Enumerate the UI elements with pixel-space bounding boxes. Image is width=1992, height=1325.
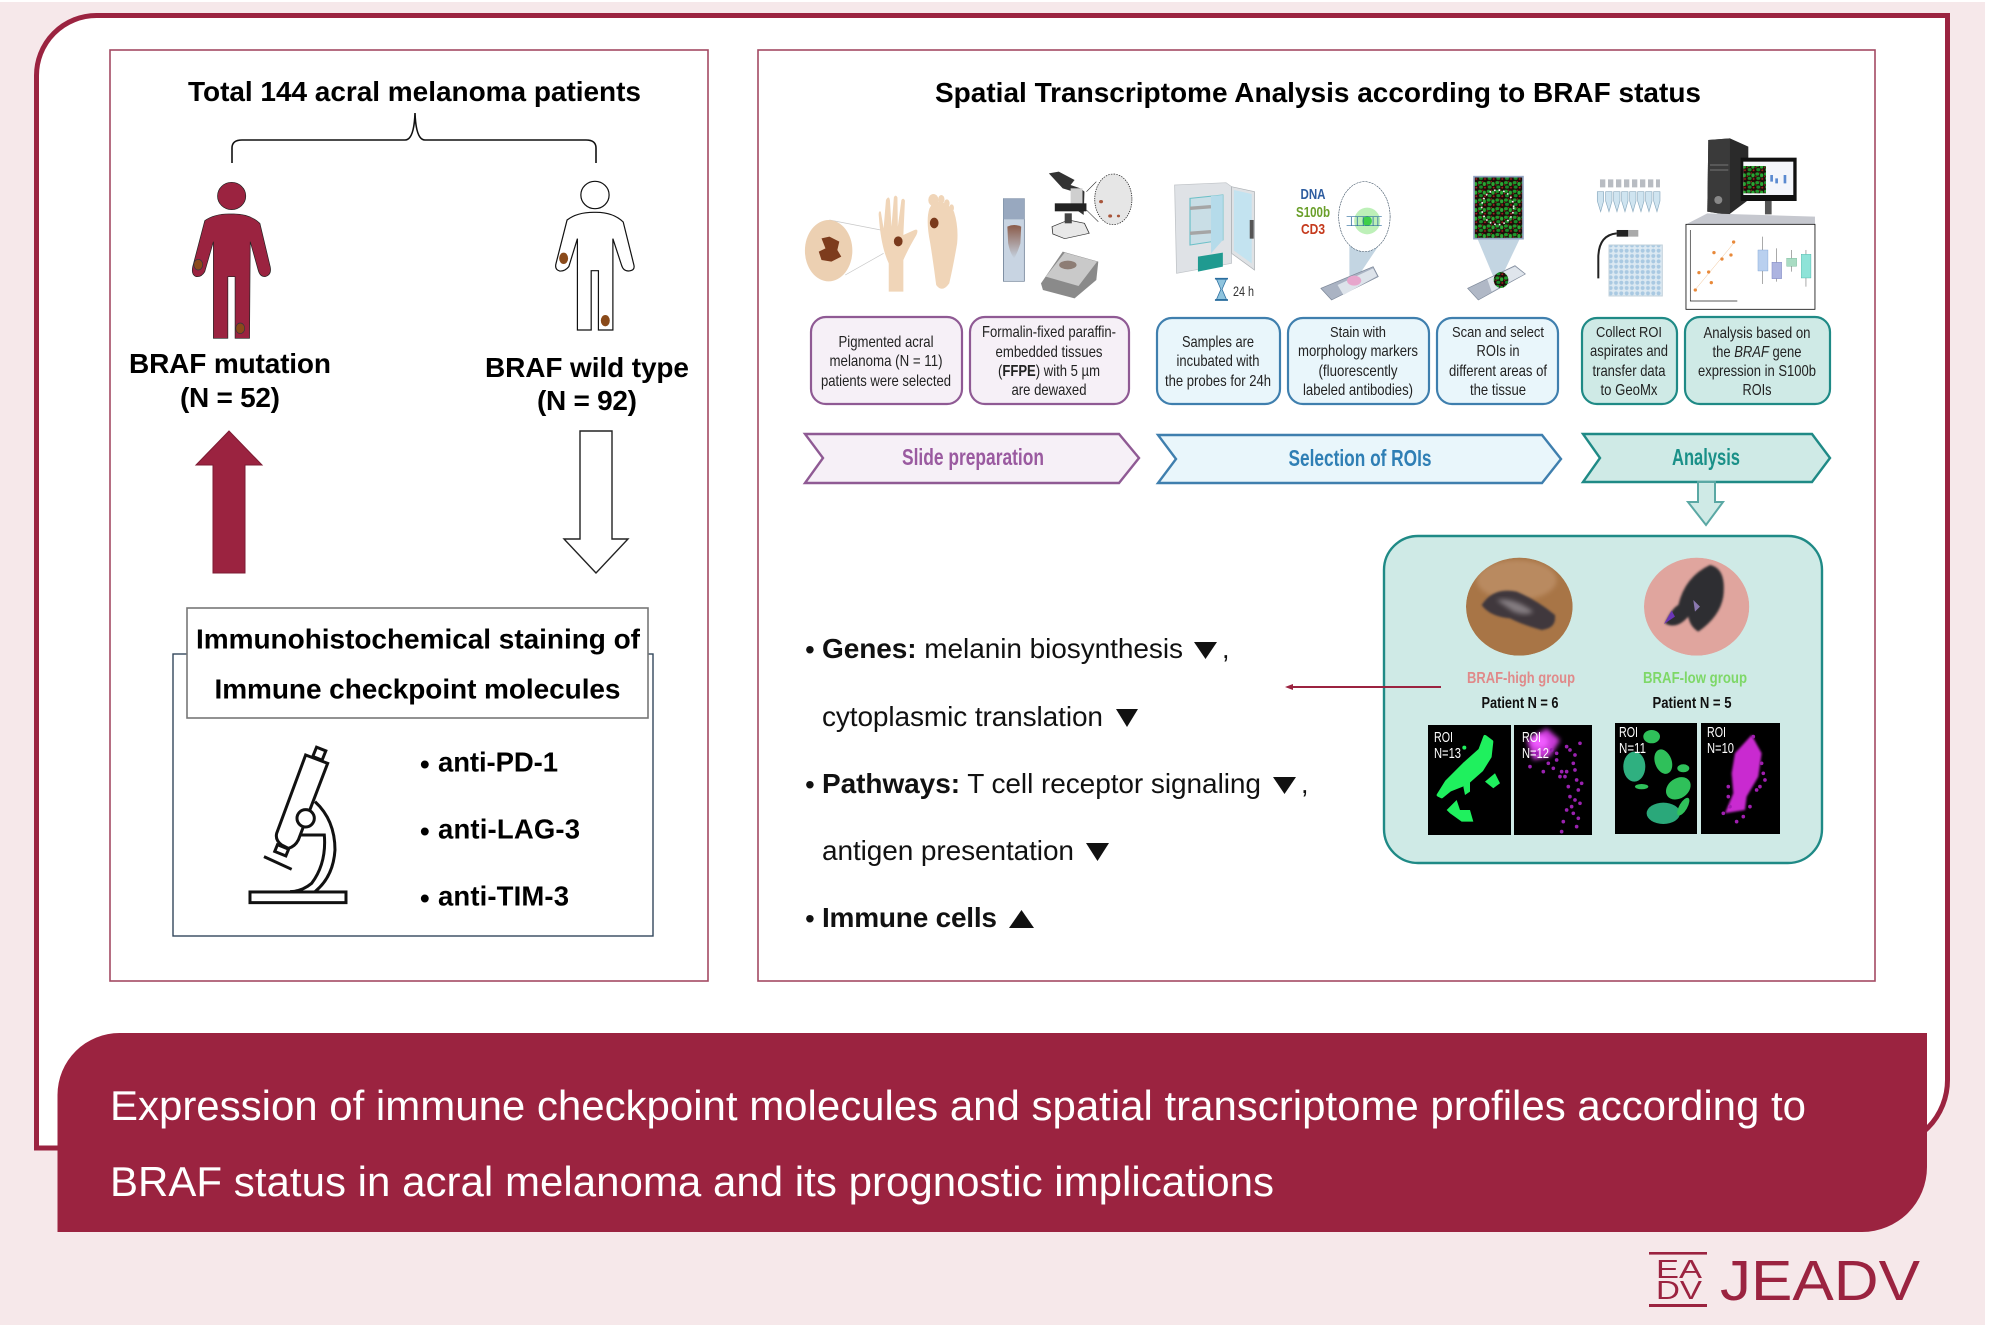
arrow marker: melanin down xyxy=(1194,642,1217,659)
step card: morphology markers: (fluorescently xyxy=(1318,363,1398,380)
label: BRAF-high group: BRAF-high group xyxy=(1467,670,1575,687)
antibody list xyxy=(420,746,580,914)
label: BRAF-low group: BRAF-low group xyxy=(1643,670,1747,687)
heading: total patients: Total 144 acral melanoma patients xyxy=(188,76,641,107)
step card: scan ROIs xyxy=(1437,318,1558,404)
results list: • xyxy=(805,903,815,934)
step card: incubation: the probes for 24h xyxy=(1165,373,1271,390)
image: ROI high green xyxy=(1428,725,1511,835)
arrow marker: presentation down xyxy=(1086,843,1109,861)
step card: scan ROIs: ROIs in xyxy=(1476,343,1520,360)
arrow: up xyxy=(196,431,262,573)
antibody list: • xyxy=(420,882,430,914)
staining title: Immunohistochemical staining of xyxy=(196,624,641,654)
labels: DNA S100b CD3: CD3 xyxy=(1301,221,1325,238)
logo: JEADV: EA xyxy=(1656,1254,1703,1284)
panel: BRAF groups xyxy=(1384,536,1822,863)
step card: incubation: incubated with xyxy=(1176,353,1260,370)
chevron: slide preparation: Slide preparation xyxy=(902,444,1044,470)
arrow marker: translation down xyxy=(1116,709,1138,727)
step card: incubation xyxy=(1157,318,1280,404)
image: ROI low purple: N=10 xyxy=(1707,741,1734,757)
image: ROI high green: ROI xyxy=(1434,730,1453,746)
staining title: Immune checkpoint molecules xyxy=(214,674,620,704)
logo: JEADV: JEADV xyxy=(1720,1249,1920,1313)
icon: tubes and plate xyxy=(1597,183,1662,296)
label: BRAF-low group xyxy=(1643,670,1747,712)
label: BRAF mutation: BRAF mutation xyxy=(129,348,331,379)
step card: morphology markers: Stain with xyxy=(1330,324,1386,341)
results list: Immune cells xyxy=(822,902,997,933)
arrow marker: signaling down xyxy=(1273,777,1296,794)
panel: spatial transcriptome analysis xyxy=(758,50,1875,981)
antibody list: • xyxy=(420,748,430,780)
photo: BRAF-high lesion xyxy=(1466,558,1573,656)
step card: morphology markers: morphology markers xyxy=(1298,343,1418,360)
arrow: analysis down xyxy=(1688,482,1723,525)
chevron: selection of ROIs: Selection of ROIs xyxy=(1288,445,1432,471)
step card: BRAF analysis xyxy=(1685,317,1830,404)
step card: morphology markers: labeled antibodies) xyxy=(1303,382,1413,399)
label: BRAF wild type: BRAF wild type xyxy=(485,352,689,383)
image: ROI high purple xyxy=(1514,725,1592,835)
chevron: analysis: Analysis xyxy=(1672,444,1740,470)
logo: JEADV: DV xyxy=(1656,1275,1703,1305)
step card: scan ROIs: different areas of xyxy=(1449,363,1547,380)
staining box xyxy=(173,608,653,936)
step card: BRAF analysis: the BRAF gene xyxy=(1712,344,1802,361)
step card: scan ROIs: Scan and select xyxy=(1452,324,1545,341)
title banner: BRAF status in acral melanoma and its prognostic implications xyxy=(110,1158,1274,1205)
results list: , xyxy=(1301,769,1309,799)
image: ROI low green: N=11 xyxy=(1619,741,1646,757)
icon: red person xyxy=(192,182,271,338)
image: ROI low purple xyxy=(1701,723,1780,834)
step card: scan ROIs: the tissue xyxy=(1470,382,1526,399)
label: BRAF mutation: (N = 52) xyxy=(180,382,280,413)
label: BRAF-high group: Patient N = 6 xyxy=(1482,695,1559,712)
bracket xyxy=(232,113,596,163)
results list xyxy=(805,633,1309,934)
staining title xyxy=(187,608,648,718)
results list: Pathways: T cell receptor signaling xyxy=(822,768,1261,799)
step card: FFPE: Formalin-fixed paraffin- xyxy=(982,324,1116,341)
chevron: slide preparation xyxy=(805,434,1139,483)
image: ROI low green xyxy=(1615,723,1697,834)
icon: magnified stain xyxy=(1321,182,1390,300)
icon: slide, microscope, hot plate xyxy=(1003,172,1132,298)
heading: spatial transcriptome: Spatial Transcriptome Analysis according to BRAF status xyxy=(935,77,1701,108)
label: BRAF-low group: Patient N = 5 xyxy=(1652,695,1732,712)
results list: cytoplasmic translation xyxy=(822,701,1103,732)
antibody list: • xyxy=(420,816,430,846)
results list: , xyxy=(1222,634,1230,664)
labels: DNA S100b CD3 xyxy=(1296,186,1330,238)
step card: collect aspirates: transfer data xyxy=(1592,363,1666,380)
title banner xyxy=(58,1033,1927,1232)
image: ROI high green: N=13 xyxy=(1434,746,1461,762)
step card: pigmented acral melanoma: patients were selected xyxy=(821,373,951,390)
step card: pigmented acral melanoma: melanoma (N = 11) xyxy=(830,353,942,370)
label: 24 h: 24 h xyxy=(1233,283,1254,299)
step card: FFPE xyxy=(970,317,1129,404)
results list: • xyxy=(805,769,815,800)
icon: hourglass xyxy=(1215,279,1228,300)
icon: white person xyxy=(556,181,634,330)
antibody list: anti-TIM-3 xyxy=(438,880,569,912)
step card: BRAF analysis: Analysis based on xyxy=(1704,325,1810,342)
labels: DNA S100b CD3: DNA xyxy=(1300,186,1326,203)
image: ROI high purple: N=12 xyxy=(1522,746,1549,762)
label: BRAF-high group xyxy=(1467,670,1575,712)
logo: JEADV xyxy=(1649,1249,1920,1313)
label: BRAF wild type xyxy=(485,352,689,416)
step card: FFPE: (FFPE) with 5 µm xyxy=(998,363,1100,380)
results list: • xyxy=(805,634,815,665)
step card: BRAF analysis: ROIs xyxy=(1742,382,1772,399)
chevron: selection of ROIs xyxy=(1158,435,1561,483)
step card: collect aspirates: to GeoMx xyxy=(1600,382,1658,399)
label: BRAF mutation xyxy=(129,348,331,413)
step card: BRAF analysis: expression in S100b xyxy=(1698,363,1816,380)
step card: collect aspirates: aspirates and xyxy=(1590,343,1668,360)
step card: incubation: Samples are xyxy=(1182,334,1254,351)
image: ROI low green: ROI xyxy=(1619,725,1638,741)
panel: patient cohort xyxy=(110,50,708,981)
step card: morphology markers xyxy=(1288,318,1429,404)
arrow marker: immune up xyxy=(1009,910,1034,928)
labels: DNA S100b CD3: S100b xyxy=(1296,204,1330,221)
antibody list: anti-PD-1 xyxy=(438,746,558,778)
image: ROI high purple: ROI xyxy=(1522,730,1541,746)
label: BRAF wild type: (N = 92) xyxy=(537,385,637,416)
icon: computer and chart xyxy=(1686,138,1815,309)
step card: FFPE: are dewaxed xyxy=(1012,382,1086,399)
photo: BRAF-low lesion xyxy=(1644,558,1749,656)
chevron: analysis xyxy=(1583,434,1830,482)
icon: skin lesion, hand and foot xyxy=(805,194,958,292)
step card: collect aspirates: Collect ROI xyxy=(1596,324,1662,341)
icon: microscope xyxy=(250,747,346,903)
results list: Genes: melanin biosynthesis xyxy=(822,633,1183,664)
antibody list: anti-LAG-3 xyxy=(438,814,580,844)
image: ROI low purple: ROI xyxy=(1707,725,1726,741)
icon: incubator xyxy=(1175,183,1254,273)
step card: collect aspirates xyxy=(1582,318,1677,404)
step card: pigmented acral melanoma xyxy=(811,317,962,404)
icon: scanned tissue xyxy=(1468,177,1525,300)
title banner: Expression of immune checkpoint molecules and spatial transcriptome profiles according to xyxy=(110,1082,1806,1129)
step card: pigmented acral melanoma: Pigmented acral xyxy=(838,334,934,351)
results list: antigen presentation xyxy=(822,835,1074,866)
step card: FFPE: embedded tissues xyxy=(996,344,1102,361)
arrow: to results xyxy=(1285,684,1441,690)
arrow: down xyxy=(564,431,628,573)
